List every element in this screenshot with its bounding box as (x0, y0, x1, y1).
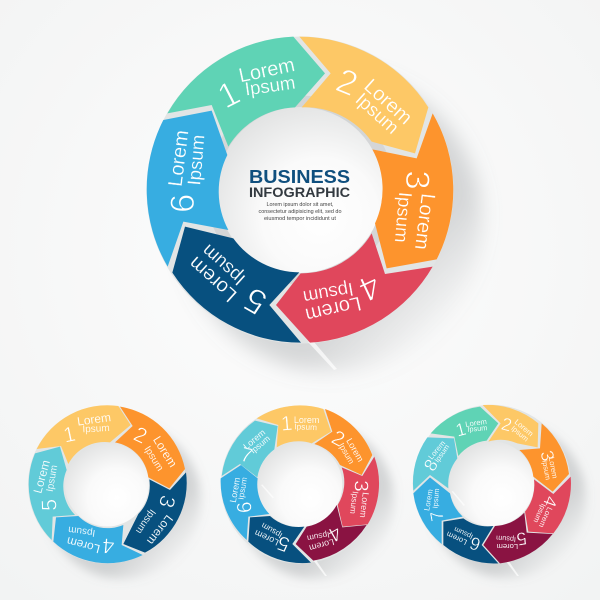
segment 5: navy arrow: Lorem (185, 252, 242, 306)
step 3: navy (123, 472, 187, 553)
segment 4: red arrow: Lorem (303, 292, 363, 326)
step 2: orange: 2 (130, 422, 151, 449)
step 5: maroon: 5 (515, 528, 528, 549)
step 4: blue (53, 516, 143, 563)
step 4: red: Ipsum (532, 502, 548, 524)
step 8: light teal: Lorem (426, 439, 447, 461)
step 5: maroon (483, 513, 553, 563)
center title block: INFOGRAPHIC (249, 184, 350, 200)
step 5: navy (248, 516, 311, 563)
panel: five-step cycle (29, 405, 201, 579)
step 1: yellow: Ipsum (82, 423, 110, 435)
step 2: orange: Ipsum (337, 441, 357, 466)
segment 5: navy arrow: 5 (238, 279, 274, 322)
panel: eight-step cycle (413, 405, 586, 578)
step 1: yellow (37, 405, 131, 464)
step 5: maroon: Ipsum (496, 533, 516, 544)
light streak (452, 491, 465, 506)
step 1: teal: Lorem (465, 417, 487, 429)
step 1: yellow: Ipsum (294, 421, 317, 432)
segment 3: orange arrow: Lorem (410, 192, 439, 251)
step 4: blue: Ipsum (68, 524, 96, 538)
step 5: maroon: Lorem (496, 542, 518, 551)
step 6: navy: Ipsum (452, 525, 474, 541)
step 2: yellow: Lorem (513, 417, 535, 438)
center title block: consectetur adipisicing elit, sed do (258, 209, 342, 215)
step 6: blue (221, 465, 269, 540)
segment 5: navy arrow: Ipsum (197, 240, 249, 290)
step 8: light teal (413, 437, 457, 491)
step 3: navy: 3 (154, 493, 180, 510)
step 2: orange: Lorem (150, 434, 180, 470)
step 1: teal: Ipsum (467, 423, 488, 434)
step 5: light teal: Ipsum (45, 464, 60, 493)
step 7: blue (413, 477, 463, 544)
step 5: navy: Ipsum (259, 521, 284, 541)
step 5: light teal (29, 447, 75, 540)
segment 2: yellow arrow: Ipsum (352, 88, 403, 138)
step 1: yellow: 1 (61, 422, 78, 448)
step 1: teal (431, 407, 498, 456)
step 8: light teal: Ipsum (432, 443, 451, 464)
segment 2: yellow arrow: Lorem (359, 75, 416, 129)
step 2: yellow: Ipsum (509, 424, 530, 443)
step 6: navy (443, 518, 498, 563)
step 6: blue: Ipsum (235, 476, 249, 500)
step 7: light teal (222, 421, 278, 477)
step 7: light teal: Ipsum (248, 433, 272, 455)
step 1: teal: 1 (453, 419, 468, 441)
step 3: navy: Lorem (144, 512, 176, 548)
center title block: eiusmod tempor incididunt ut (264, 216, 336, 222)
panel: seven-step cycle (221, 405, 394, 579)
step 3: orange: 3 (536, 448, 558, 463)
step 4: red: Lorem (537, 506, 554, 529)
segment 6: blue arrow: Lorem (165, 129, 193, 188)
step 6: blue: 6 (233, 501, 257, 514)
step 4: red (525, 477, 571, 533)
segment 1: teal arrow: 1 (212, 74, 246, 116)
step 2: yellow (483, 405, 538, 447)
step 1: yellow (257, 405, 331, 447)
step 3: red (338, 457, 379, 527)
step 1: yellow: 1 (280, 412, 293, 436)
step 7: light teal: 7 (238, 443, 255, 468)
segment 3: orange arrow (372, 113, 453, 268)
step 3: red: 3 (350, 480, 373, 492)
step 1: yellow: Lorem (76, 410, 112, 429)
step 7: blue: Lorem (422, 489, 435, 511)
segment 6: blue arrow: Ipsum (183, 134, 209, 186)
step 3: navy: Ipsum (133, 507, 158, 535)
step 3: red: Lorem (358, 492, 371, 518)
segment 4: red arrow: Ipsum (302, 279, 355, 308)
segment 2: yellow arrow (299, 37, 428, 153)
step 4: maroon (296, 505, 367, 561)
step 1: yellow: Lorem (294, 415, 319, 425)
step 4: red: 4 (539, 493, 561, 510)
step 2: orange: Lorem (344, 436, 366, 464)
step 7: light teal: Lorem (241, 427, 267, 451)
segment 4: red arrow: 4 (353, 266, 386, 308)
step 5: navy: 5 (274, 531, 293, 556)
step 7: blue: Ipsum (430, 488, 441, 509)
step 7: blue: 7 (426, 509, 448, 523)
segment 1: teal arrow: Ipsum (243, 72, 297, 99)
segment 1: teal arrow (167, 37, 325, 147)
segment 3: orange arrow: Ipsum (391, 191, 416, 244)
step 2: orange: 2 (328, 426, 349, 452)
step 8: light teal: 8 (420, 456, 442, 475)
step 5: light teal: 5 (37, 499, 62, 511)
step 2: orange (115, 407, 185, 488)
step 4: maroon: Ipsum (306, 530, 330, 544)
segment 4: red arrow (276, 233, 433, 343)
step 3: red: Ipsum (348, 491, 361, 515)
center title block: BUSINESS (249, 167, 350, 187)
center title block: Lorem ipsum dolor sit amet, (266, 202, 334, 208)
step 3: orange (519, 423, 569, 492)
segment 5: navy arrow (172, 227, 301, 343)
step 2: orange: Ipsum (141, 444, 165, 473)
step 4: maroon: Lorem (308, 537, 335, 553)
step 2: yellow: 2 (499, 414, 514, 436)
segment 6: blue arrow: 6 (164, 194, 202, 213)
segment 1: teal arrow: Lorem (237, 54, 297, 87)
step 5: navy: Lorem (253, 528, 280, 548)
step 4: maroon: 4 (324, 521, 345, 546)
step 6: blue: Lorem (228, 477, 242, 503)
center title block (249, 167, 350, 222)
step 3: orange: Ipsum (540, 459, 553, 481)
light streak (261, 484, 274, 498)
step 3: orange: Lorem (547, 456, 559, 479)
segment 6: blue arrow (147, 111, 228, 267)
step 4: blue: Lorem (65, 534, 102, 556)
step 6: navy: 6 (467, 533, 483, 555)
step 5: light teal: Lorem (31, 458, 53, 495)
step 2: orange (314, 409, 372, 475)
segment 2: yellow arrow: 2 (331, 62, 363, 104)
segment 3: orange arrow: 3 (398, 170, 436, 190)
step 4: blue: 4 (101, 533, 115, 558)
step 6: navy: Lorem (445, 530, 468, 547)
panel: main six-step cycle (147, 37, 482, 372)
